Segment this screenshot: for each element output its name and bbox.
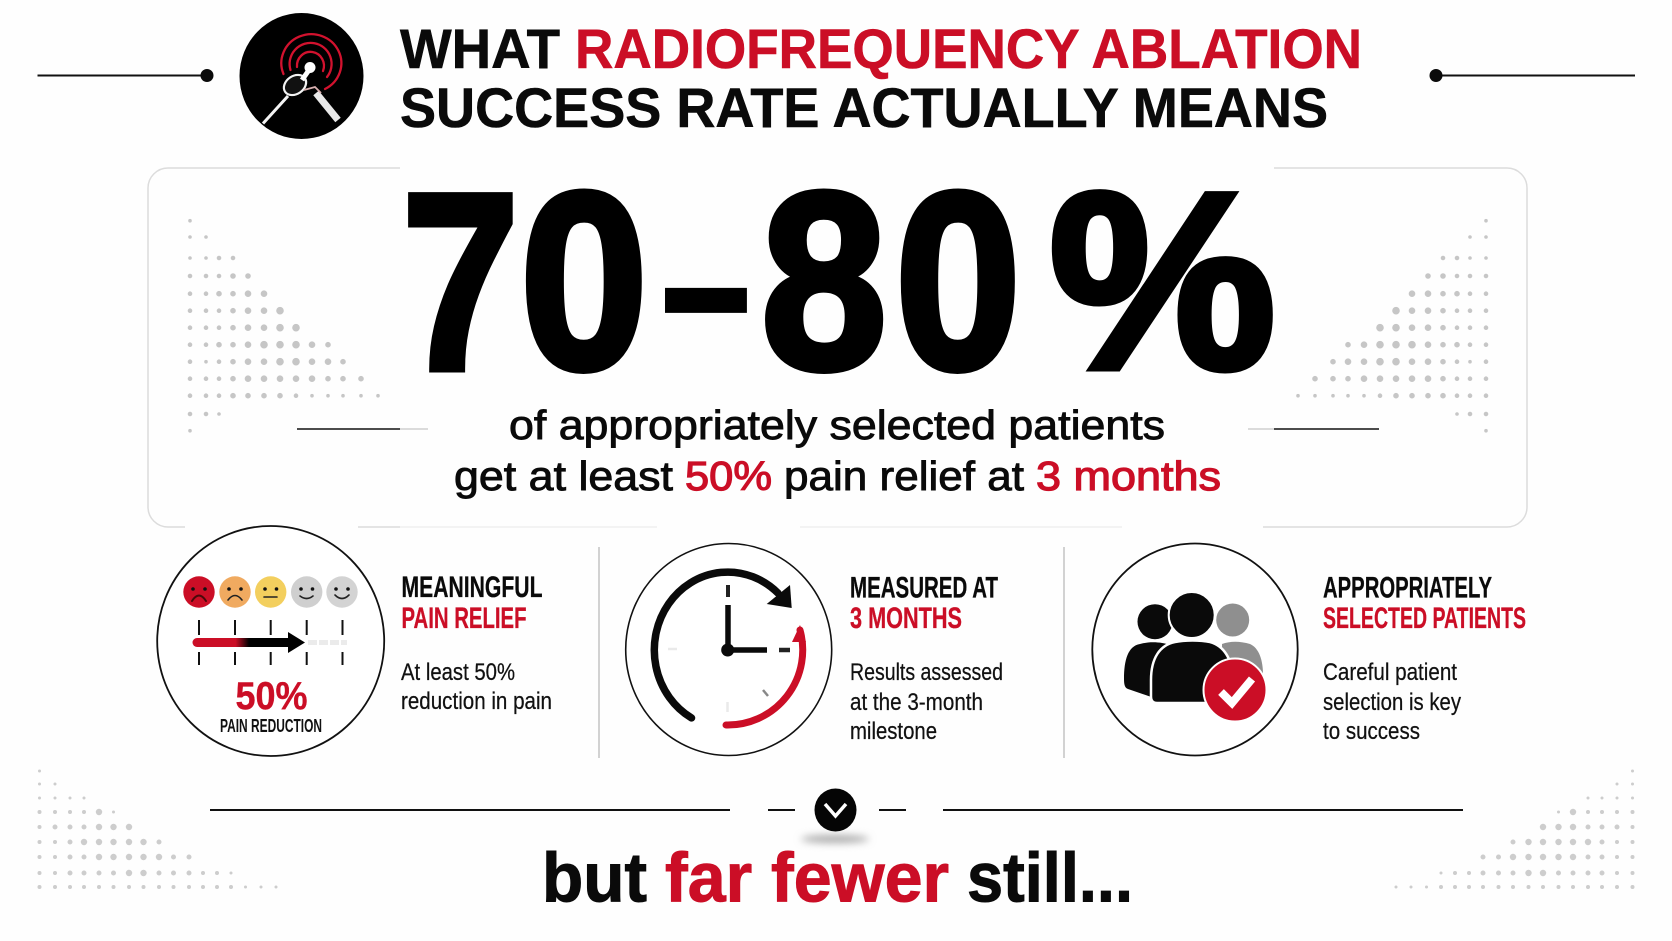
heading: 3 MONTHS — [850, 602, 962, 635]
heading — [402, 571, 542, 635]
big number: 0 — [895, 141, 1021, 422]
description: Careful patient — [1323, 659, 1457, 686]
caption: 50% — [685, 453, 772, 499]
description: At least 50% — [401, 659, 515, 686]
icon: pain scale: 50% — [236, 675, 308, 718]
big number — [402, 141, 1276, 423]
dot pattern: footer right — [1396, 771, 1632, 887]
dot pattern: panel right — [1298, 221, 1486, 431]
title — [400, 17, 1362, 139]
caption: pain relief at — [784, 453, 1025, 499]
heading: MEASURED AT — [850, 572, 998, 604]
divider: right of caption — [1248, 428, 1379, 430]
heading — [850, 572, 998, 635]
big number: % — [1049, 141, 1276, 422]
description: at the 3-month — [850, 689, 983, 716]
icon: patient group with check — [1092, 544, 1298, 756]
description — [850, 659, 1003, 745]
title: WHAT — [400, 17, 560, 80]
big number: 8 — [761, 141, 887, 422]
header rule: right — [1430, 69, 1635, 82]
heading: APPROPRIATELY — [1323, 572, 1492, 604]
description: to success — [1323, 718, 1420, 745]
dot pattern: panel left — [190, 221, 378, 431]
divider: left of caption — [297, 428, 428, 430]
description — [1323, 659, 1461, 745]
heading: MEANINGFUL — [402, 571, 542, 604]
feature: measured at 3 months — [626, 544, 1003, 756]
footer divider — [210, 809, 1463, 811]
caption: get at least — [454, 453, 674, 499]
description: selection is key — [1323, 689, 1461, 716]
icon: clock — [626, 544, 832, 756]
closing line — [542, 838, 1133, 916]
header rule: left — [38, 69, 214, 82]
caption: of appropriately selected patients — [509, 402, 1165, 448]
icon: chevron down — [801, 788, 869, 843]
description: Results assessed — [850, 659, 1003, 686]
big number: 7 — [402, 142, 519, 423]
title: SUCCESS RATE ACTUALLY MEANS — [400, 76, 1328, 139]
feature: meaningful pain relief — [157, 526, 552, 756]
closing line: far fewer — [665, 838, 949, 916]
big number: 0 — [520, 141, 648, 422]
description: milestone — [850, 718, 937, 745]
heading — [1323, 572, 1526, 635]
feature: appropriately selected patients — [1092, 544, 1526, 756]
icon: pain scale: PAIN REDUCTION — [220, 716, 322, 736]
heading: SELECTED PATIENTS — [1323, 602, 1526, 635]
caption — [454, 402, 1221, 499]
big number: – — [660, 141, 752, 422]
title: RADIOFREQUENCY ABLATION — [575, 17, 1362, 80]
icon: radiofrequency probe — [240, 13, 364, 139]
closing line: still... — [967, 838, 1133, 916]
description: reduction in pain — [401, 688, 552, 715]
dot pattern: footer left — [40, 771, 276, 887]
closing line: but — [542, 838, 647, 916]
icon: pain scale — [157, 526, 384, 756]
heading: PAIN RELIEF — [402, 602, 526, 635]
description — [401, 659, 552, 715]
panel: headline statistic — [148, 141, 1527, 527]
caption: 3 months — [1036, 453, 1221, 499]
